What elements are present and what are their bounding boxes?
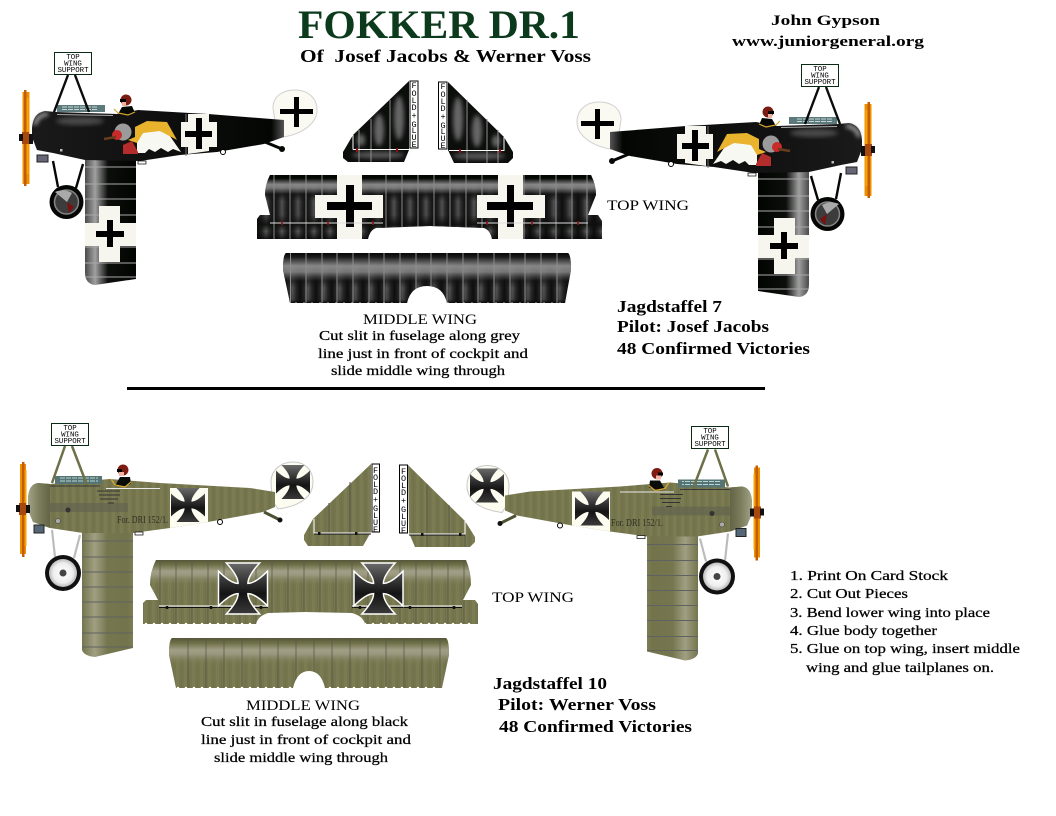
middle wing instructions, grey line: Cut slit in fuselage along grey [319,329,520,344]
black left tailplane: E [411,140,417,150]
black left tailplane: D [411,103,417,113]
black right tailplane: L [440,127,446,137]
assembly instructions: 3. Bend lower wing into place [790,606,990,621]
olive top wing [143,560,478,624]
olive left tailplane: L [373,480,378,490]
wing support tab: TOP [63,425,77,433]
olive right tailplane: F [401,467,406,477]
author credit: www.juniorgeneral.org [732,34,925,50]
iron crosses [218,563,403,614]
olive right tailplane: O [401,474,406,484]
black right tailplane: E [440,141,446,151]
black right tailplane: L [440,97,446,107]
olive right tailplane: U [401,519,406,529]
wing support tab: WING [61,432,79,440]
squadron details: Werner Voss [493,674,693,736]
olive left tailplane: G [373,504,378,514]
squadron details: Werner Voss: 48 Confirmed Victories [499,717,693,736]
black left tailplane: + [411,111,417,121]
olive right tailplane [400,465,475,547]
assembly instructions: 5. Glue on top wing, insert middle [790,642,1020,657]
squadron details: Josef Jacobs: 48 Confirmed Victories [617,339,811,358]
olive left tailplane: O [373,473,378,483]
black right tailplane: U [440,134,446,144]
wing support tab [692,426,728,449]
assembly instructions [790,569,1020,676]
olive right tailplane: + [401,496,406,506]
wing support tab [802,64,838,87]
wing support tab [54,52,92,75]
wing support tab: SUPPORT [694,441,726,449]
middle wing instructions, grey line [318,312,528,379]
squadron details: Josef Jacobs [617,297,811,358]
olive right tailplane: E [401,526,406,536]
black right tailplane: G [440,121,446,131]
squadron details: Werner Voss: Pilot: Werner Voss [498,695,657,714]
author credit [732,13,925,50]
middle wing instructions, black line: line just in front of cockpit and [201,733,411,748]
olive aircraft, left [16,424,313,657]
wing support tab: SUPPORT [54,438,86,446]
assembly instructions: wing and glue tailplanes on. [806,661,994,676]
assembly instructions: 1. Print On Card Stock [790,569,948,584]
olive left tailplane [304,464,380,546]
fuselage serial: For. DRI 152/1. [611,518,663,529]
black right tailplane: F [440,82,446,92]
wing support tab: SUPPORT [804,79,836,87]
middle wing instructions, grey line: line just in front of cockpit and [318,347,528,362]
black left tailplane: F [411,81,417,91]
olive right tailplane: G [401,505,406,515]
olive right tailplane: D [401,488,406,498]
olive left tailplane: U [373,518,378,528]
middle wing instructions, grey line: slide middle wing through [331,364,505,379]
black aircraft, right [577,64,875,297]
wing support tab: WING [811,72,829,80]
olive right tailplane: L [401,512,406,522]
black left tailplane: G [411,120,417,130]
title: FOKKER DR.1 [298,2,580,47]
black left tailplane: U [411,133,417,143]
wing support tab: SUPPORT [57,67,89,75]
olive right tailplane: L [401,481,406,491]
olive left tailplane: F [373,466,378,476]
middle wing instructions, grey line: MIDDLE WING [363,312,478,328]
black left tailplane: L [411,126,417,136]
label: top wing: TOP WING [607,198,689,214]
middle wing instructions, black line: Cut slit in fuselage along black [201,715,408,730]
assembly instructions: 2. Cut Out Pieces [790,587,908,602]
middle wing instructions, black line: MIDDLE WING [246,698,361,714]
wing support tab: WING [701,434,719,442]
olive left tailplane: L [373,511,378,521]
black right tailplane: D [440,104,446,114]
wing support tab: TOP [813,66,827,74]
black middle wing [283,253,571,303]
olive aircraft, right [467,426,764,660]
olive left tailplane: D [373,487,378,497]
wing support tab: TOP [703,428,717,436]
black aircraft, left [19,52,317,285]
black top wing [257,175,602,239]
squadron details: Werner Voss: Jagdstaffel 10 [493,674,607,693]
squadron details: Josef Jacobs: Jagdstaffel 7 [617,297,722,316]
olive left tailplane: E [373,525,378,535]
olive left tailplane: + [373,495,378,505]
subtitle: Of Josef Jacobs & Werner Voss [300,46,591,66]
black right tailplane: O [440,90,446,100]
black left tailplane: L [411,96,417,106]
fuselage serial: For. DRI 152/1. [117,515,168,526]
black right tailplane: + [440,112,446,122]
author credit: John Gypson [771,13,881,29]
assembly instructions: 4. Glue body together [790,624,937,639]
black left tailplane: O [411,89,417,99]
middle wing instructions, black line [201,698,411,766]
black right tailplane [438,82,513,163]
wing support tab: TOP [66,54,80,62]
label: top wing: TOP WING [492,590,574,606]
squadron details: Josef Jacobs: Pilot: Josef Jacobs [617,317,770,336]
wing support tab: WING [64,60,82,68]
middle wing instructions, black line: slide middle wing through [214,751,388,766]
wing support tab [52,424,88,446]
olive middle wing [169,638,449,688]
black left tailplane [343,81,418,162]
